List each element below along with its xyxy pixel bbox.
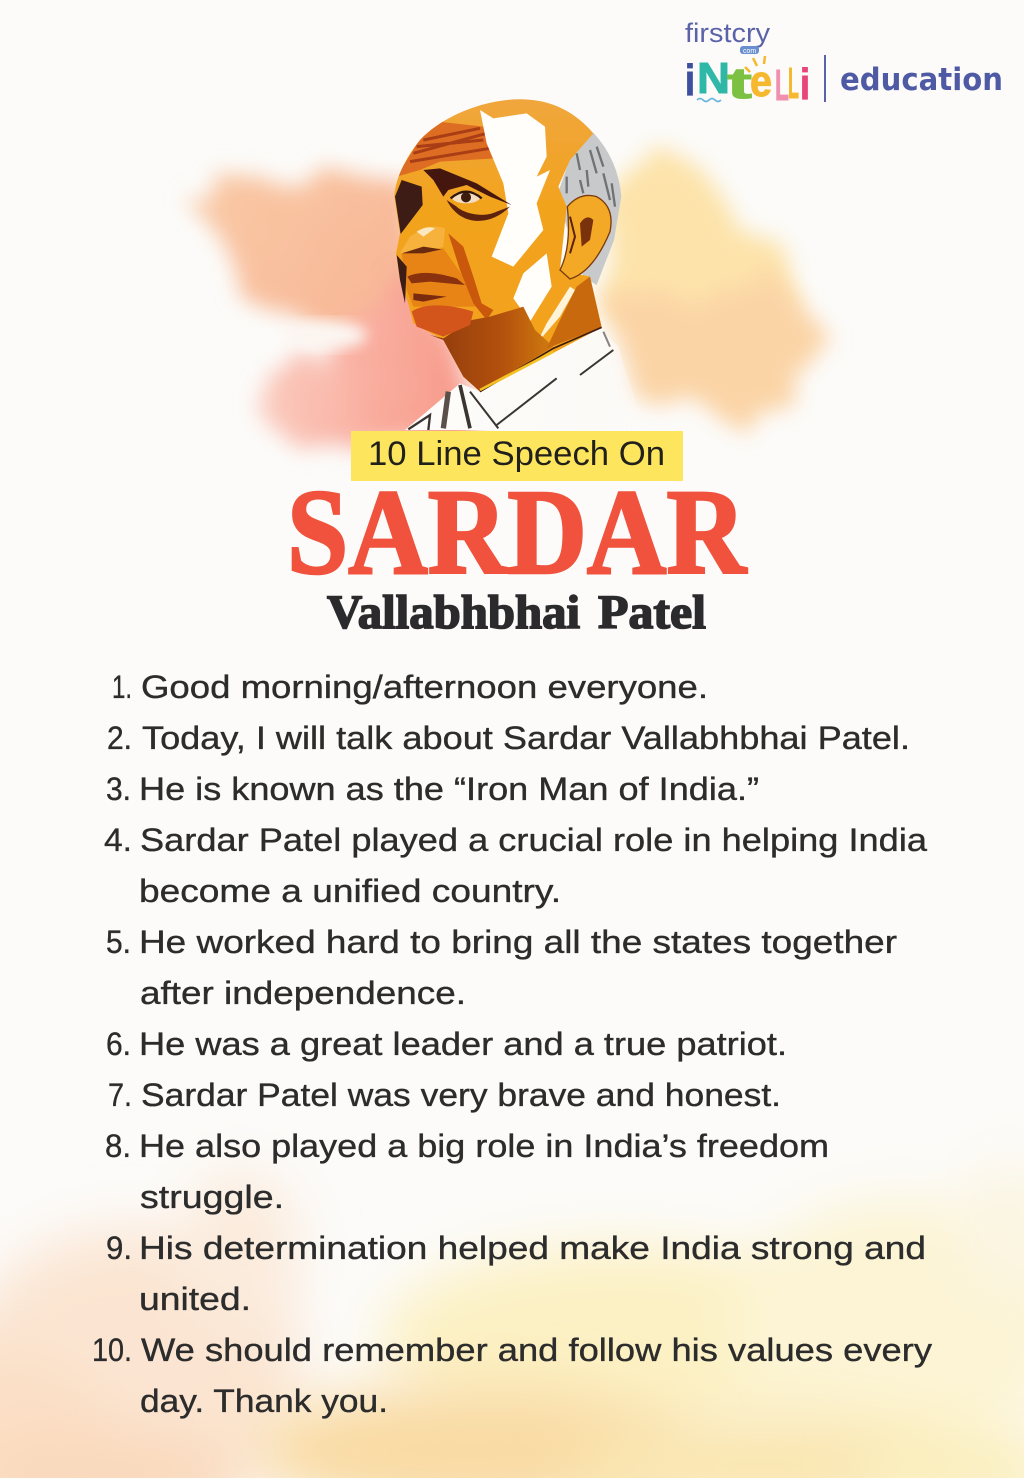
line 5: after independence.	[140, 975, 466, 1011]
splash: peach left	[192, 168, 425, 345]
logo: intelli wordmark: i	[685, 56, 695, 105]
splash: yellow right	[605, 140, 800, 340]
title: Vallabhbhai Patel	[327, 586, 706, 639]
portrait: under-eye shadow	[447, 200, 510, 221]
line 8: He also played a big role in India’s freedom	[139, 1128, 829, 1164]
line 8: 8.	[105, 1128, 131, 1164]
portrait: shirt	[405, 328, 647, 430]
logo: intelli wordmark: e	[750, 57, 772, 106]
portrait: white highlight on temple	[480, 110, 550, 267]
portrait: brow	[423, 168, 512, 205]
portrait: neck highlight	[537, 287, 575, 343]
line 10: day. Thank you.	[140, 1383, 388, 1419]
logo: firstcry intelli education	[685, 18, 1003, 110]
line 7: Sardar Patel was very brave and honest.	[141, 1077, 781, 1113]
portrait: mid face shadow	[448, 233, 493, 320]
title: Vallabhbhai Patel: Patel	[598, 586, 706, 639]
portrait: eye	[451, 191, 482, 203]
line 8	[105, 1128, 829, 1215]
line 1: 1.	[112, 669, 132, 705]
portrait: ear	[560, 195, 611, 279]
line 7: 7.	[108, 1077, 132, 1113]
splash: white gap	[283, 321, 367, 349]
splash: coral lower	[248, 270, 470, 445]
line 6: 6.	[106, 1026, 131, 1062]
numbered speech list	[92, 669, 932, 1419]
logo: intelli wordmark: L	[788, 59, 799, 108]
line 9: united.	[139, 1281, 251, 1317]
line 5	[106, 924, 897, 1011]
portrait: hair	[557, 133, 621, 285]
line 5: He worked hard to bring all the states together	[139, 924, 897, 960]
logo: intelli wordmark: L	[775, 61, 789, 110]
splash: orange right	[610, 270, 828, 430]
logo: com badge	[740, 46, 759, 55]
logo: sun rays	[745, 56, 765, 72]
line 5: 5.	[106, 924, 131, 960]
line 9	[106, 1230, 926, 1317]
logo: firstcry wordmark: firstcry	[685, 18, 771, 48]
line 3: 3.	[106, 771, 131, 807]
logo: education wordmark: education	[840, 62, 1003, 98]
portrait: neck shadow	[430, 307, 553, 392]
line 10	[92, 1332, 932, 1419]
line 10: 10.	[92, 1332, 132, 1368]
logo: divider	[824, 55, 826, 102]
bottom watercolor wash	[0, 1160, 1024, 1478]
logo: com badge: com	[743, 48, 756, 55]
line 10: We should remember and follow his values every	[141, 1332, 932, 1368]
portrait: cheek shading	[402, 248, 477, 307]
line 2: 2.	[107, 720, 132, 756]
line 4	[104, 822, 927, 909]
portrait: head and face base	[394, 99, 602, 392]
portrait of Sardar Patel	[394, 99, 647, 430]
title: Vallabhbhai Patel: Vallabhbhai	[327, 586, 580, 639]
line 9: His determination helped make India strong and	[139, 1230, 926, 1266]
portrait: back of neck	[547, 277, 602, 348]
portrait: nose	[400, 227, 445, 253]
line 1: Good morning/afternoon everyone.	[141, 669, 708, 705]
portrait: chin shading	[412, 305, 473, 337]
logo: wave under N	[697, 98, 721, 102]
portrait: mouth	[407, 273, 465, 285]
subtitle badge: 10 Line Speech On	[368, 435, 665, 473]
line 2: Today, I will talk about Sardar Vallabhbhai Patel.	[142, 720, 910, 756]
logo: intelli wordmark: N	[697, 54, 730, 103]
logo: intelli wordmark: i	[800, 60, 810, 109]
portrait: white highlight on jaw	[513, 253, 552, 322]
portrait: hair strokes	[567, 147, 615, 207]
logo: intelli wordmark: t	[727, 59, 753, 108]
line 6: He was a great leader and a true patriot.	[139, 1026, 787, 1062]
portrait: shirt folds	[408, 332, 613, 430]
subtitle badge	[351, 431, 683, 481]
title: SARDAR: SARDAR	[287, 465, 748, 600]
portrait: left lip shadow	[397, 255, 407, 303]
line 4: become a unified country.	[139, 873, 561, 909]
line 8: struggle.	[140, 1179, 284, 1215]
line 4: Sardar Patel played a crucial role in helping India	[140, 822, 927, 858]
line 9: 9.	[106, 1230, 132, 1266]
logo: intelli wordmark	[685, 54, 810, 110]
portrait: dark eye socket	[395, 180, 423, 234]
watercolor splash behind portrait	[192, 140, 828, 445]
portrait: forehead shadow	[397, 122, 495, 177]
line 3: He is known as the “Iron Man of India.”	[139, 771, 759, 807]
line 4: 4.	[104, 822, 132, 858]
